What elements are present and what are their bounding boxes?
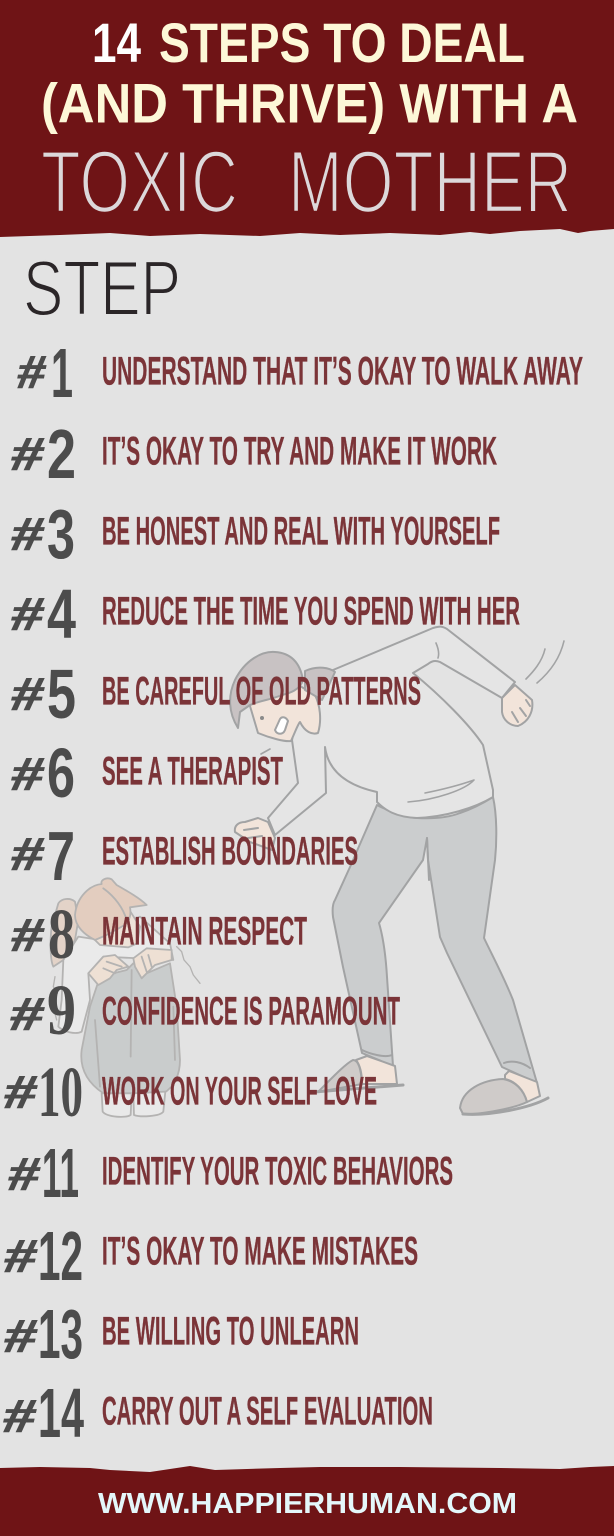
figure: crouching daughter xyxy=(51,878,200,1117)
step 5: # xyxy=(11,668,44,721)
step 4 xyxy=(11,575,520,653)
step 6: 6 xyxy=(47,734,75,812)
step 10: # xyxy=(4,1066,37,1119)
title word: toxic: TOXIC xyxy=(41,132,238,231)
title line 1 number: 14 xyxy=(92,11,141,74)
step 1: # xyxy=(17,346,46,399)
step 1: 1 xyxy=(51,334,73,412)
step 13: # xyxy=(4,1310,37,1363)
step 6: SEE A THERAPIST xyxy=(102,750,283,794)
step 14 xyxy=(3,1374,433,1452)
step 3: # xyxy=(11,508,44,561)
step 7: ESTABLISH BOUNDARIES xyxy=(102,830,358,874)
step 12: 12 xyxy=(38,1217,83,1295)
step 4: 4 xyxy=(47,575,76,653)
step 9 xyxy=(10,970,400,1050)
step 7: 7 xyxy=(47,817,75,895)
step 6 xyxy=(11,734,283,812)
step 7: # xyxy=(11,828,44,881)
illustration: mother and daughter xyxy=(51,627,564,1117)
step 13: 13 xyxy=(38,1295,83,1373)
step 8 xyxy=(11,894,307,974)
step 8: 8 xyxy=(48,894,75,974)
step 11: # xyxy=(8,1148,40,1201)
step 3: 3 xyxy=(47,495,75,573)
step 12: # xyxy=(4,1230,37,1283)
step 11: 11 xyxy=(42,1134,79,1212)
step 7 xyxy=(11,817,358,895)
step 4: # xyxy=(11,588,44,641)
step 11 xyxy=(8,1134,453,1212)
step 8: MAINTAIN RESPECT xyxy=(102,910,307,954)
step 14: # xyxy=(3,1390,36,1443)
step list xyxy=(3,334,583,1452)
title line 1: STEPS TO DEAL xyxy=(159,11,525,74)
website url: WWW.HAPPIERHUMAN.COM xyxy=(98,1488,517,1520)
step 2: 2 xyxy=(47,415,76,493)
step 5 xyxy=(11,655,421,733)
step 1 xyxy=(17,334,583,412)
footer panel xyxy=(0,1466,614,1536)
step 12 xyxy=(4,1217,418,1295)
step 5: 5 xyxy=(47,655,76,733)
step 10: 10 xyxy=(38,1052,83,1132)
step 13 xyxy=(4,1295,359,1373)
step 9: # xyxy=(10,988,44,1041)
step 3 xyxy=(11,495,500,573)
step 13: BE WILLING TO UNLEARN xyxy=(102,1310,359,1354)
step 10 xyxy=(4,1052,377,1132)
figure: angry mother xyxy=(230,627,564,1114)
step 2 xyxy=(11,415,497,493)
header panel xyxy=(0,0,614,237)
step heading: STEP xyxy=(23,244,181,332)
step 6: # xyxy=(11,748,44,801)
step 8: # xyxy=(11,909,44,962)
step 2: # xyxy=(11,428,44,481)
step 9: 9 xyxy=(47,970,76,1050)
step 14: 14 xyxy=(38,1374,84,1452)
